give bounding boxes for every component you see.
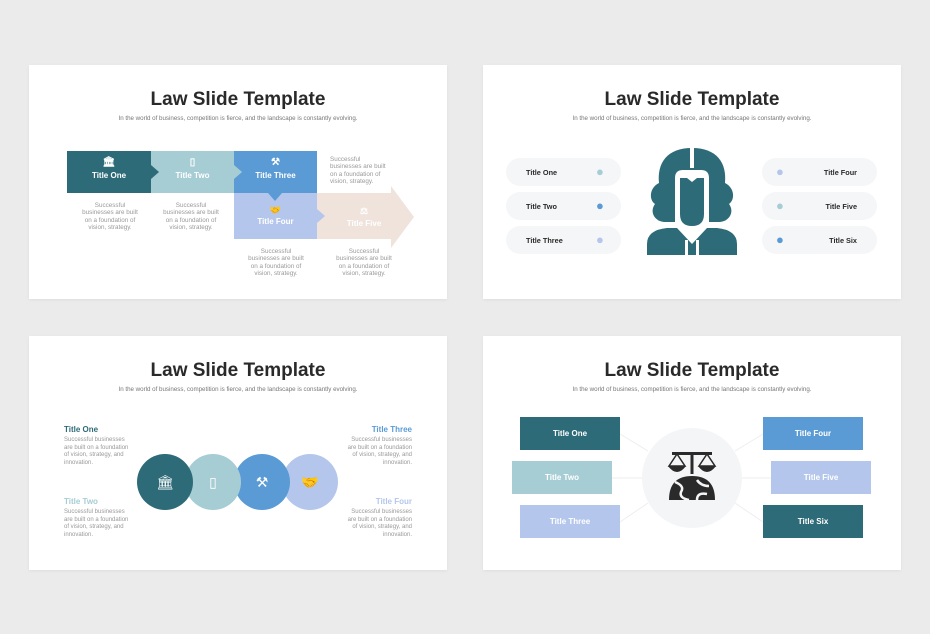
subtitle: In the world of business, competition is fierce, and the landscape is constantly evolving. — [118, 386, 358, 393]
boxes right — [763, 417, 863, 450]
box: title two: ▯ — [190, 157, 195, 168]
text: title one: Successful businesses are built on a foundation of vision, strategy, and innovation. — [64, 437, 128, 466]
title five label: Title Five — [347, 219, 381, 228]
panel: process slide: Successful businesses are built on a foundation of vision, strategy. — [336, 248, 392, 277]
connector lines — [612, 434, 771, 522]
panel: judge slide: ● — [596, 232, 604, 247]
panel: judge slide: Title Five — [826, 202, 857, 211]
box: title two: Title Two — [176, 171, 209, 180]
subtitle: In the world of business, competition is fierce, and the landscape is constantly evolving. — [572, 386, 812, 393]
panel: scales slide: Title Five — [804, 473, 838, 482]
pills right — [762, 158, 877, 186]
boxes left: Title One — [553, 429, 587, 438]
panel: judge slide: Title Six — [829, 236, 857, 245]
text blocks: Successful businesses are built on a foundation of vision, strategy. — [82, 202, 138, 231]
pills left: Title One — [526, 168, 557, 177]
text: title four: Successful businesses are built on a foundation of vision, strategy, and innovation. — [348, 509, 412, 538]
box: title one — [67, 151, 151, 193]
circles: 🤝 — [301, 474, 319, 490]
box: title four: 🤝 — [270, 205, 281, 215]
panel: scales slide — [483, 336, 901, 570]
subtitle: In the world of business, competition is fierce, and the landscape is constantly evolving. — [118, 115, 358, 122]
boxes right: Title Four — [795, 429, 831, 438]
pills right: ● — [776, 164, 784, 179]
heading: Law Slide Template — [151, 89, 325, 110]
text: title one: Title One — [64, 425, 98, 434]
circles — [282, 454, 338, 510]
panel: circles slide — [29, 336, 447, 570]
title five label: ⚖ — [360, 206, 368, 216]
panel: judge slide: ● — [596, 198, 604, 213]
panel: process slide: Successful businesses are built on a foundation of vision, strategy. — [330, 156, 386, 185]
icon: judge — [647, 148, 737, 255]
panel: circles slide: ⚒ — [256, 474, 268, 490]
panel: circles slide: 🏛 — [156, 474, 174, 490]
text: title two: Successful businesses are built on a foundation of vision, strategy, and innovation. — [64, 509, 128, 538]
center circle with scales icon — [642, 428, 742, 528]
heading: Law Slide Template — [605, 89, 779, 110]
pills left: ● — [596, 164, 604, 179]
panel: judge slide: ● — [776, 198, 784, 213]
box: title three — [234, 151, 317, 193]
box: title one: 🏛 — [103, 157, 115, 168]
panel: process slide — [29, 65, 447, 299]
panel: scales slide: Title Two — [545, 473, 579, 482]
pills left — [506, 158, 621, 186]
pills right: Title Four — [824, 168, 857, 177]
panel: judge slide — [483, 65, 901, 299]
heading: Law Slide Template — [151, 360, 325, 381]
box: title two — [151, 151, 234, 193]
panel: circles slide: ▯ — [209, 474, 217, 490]
text: title four: Title Four — [376, 497, 412, 506]
text: title two: Title Two — [64, 497, 98, 506]
panel: judge slide: Title Two — [526, 202, 557, 211]
text: title three: Successful businesses are built on a foundation of vision, strategy, and innovation. — [348, 437, 412, 466]
panel: judge slide: ● — [776, 232, 784, 247]
panel: process slide: Successful businesses are built on a foundation of vision, strategy. — [248, 248, 304, 277]
box: title three: ⚒ — [271, 157, 280, 168]
box: title four — [234, 193, 317, 239]
subtitle: In the world of business, competition is fierce, and the landscape is constantly evolving. — [572, 115, 812, 122]
connector notches — [151, 165, 325, 223]
box: title three: Title Three — [255, 171, 296, 180]
title five label — [346, 206, 381, 228]
panel: scales slide: Title Three — [550, 517, 590, 526]
panel: process slide: Successful businesses are built on a foundation of vision, strategy. — [163, 202, 219, 231]
boxes left — [520, 417, 620, 450]
heading: Law Slide Template — [605, 360, 779, 381]
panel: judge slide: Title Three — [526, 236, 563, 245]
arrow: title five — [317, 186, 414, 248]
panel: scales slide: Title Six — [798, 517, 828, 526]
box: title one: Title One — [92, 171, 126, 180]
text: title three: Title Three — [372, 425, 412, 434]
box: title four: Title Four — [257, 217, 294, 226]
